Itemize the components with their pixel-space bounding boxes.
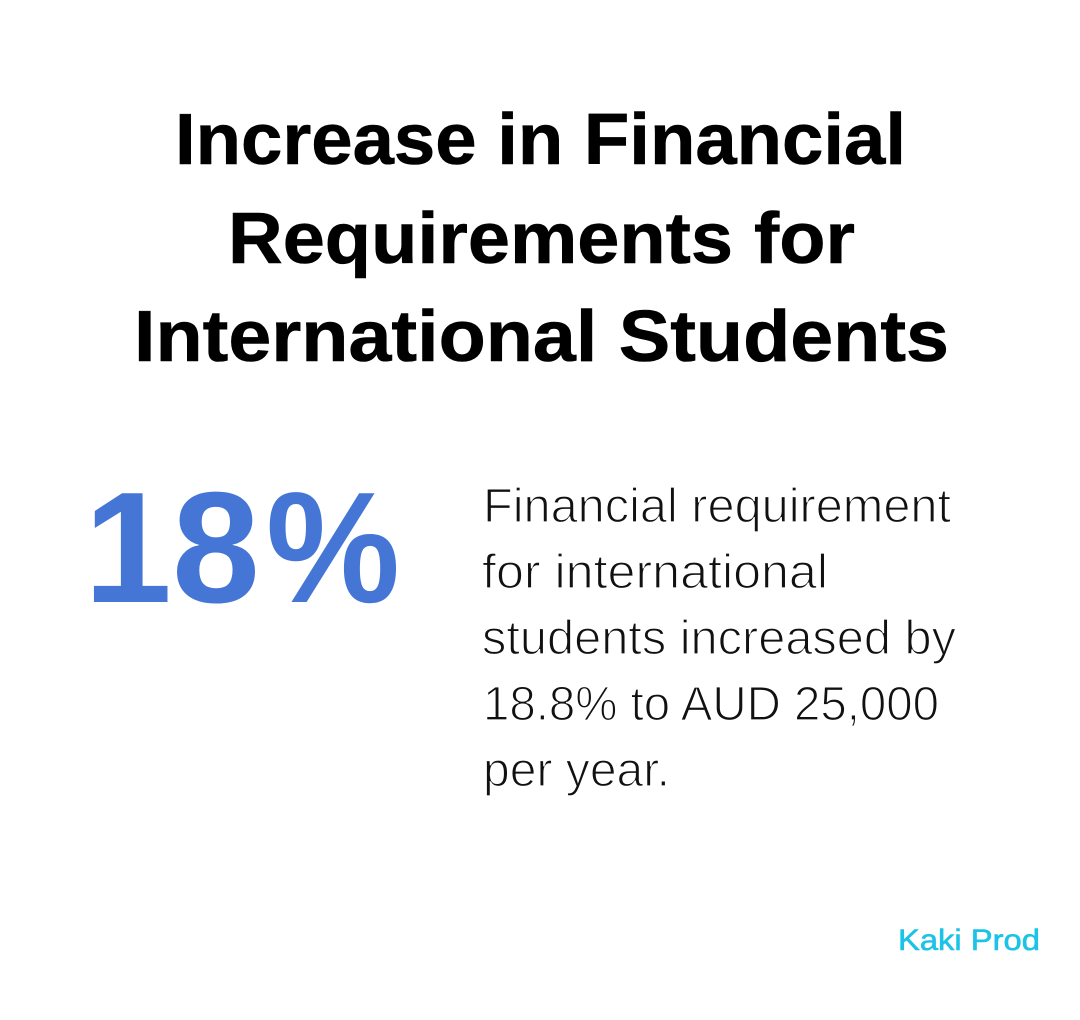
description text: for international: [482, 546, 828, 599]
title: [134, 100, 949, 377]
logo: Kaki Prod: Kaki Prod: [898, 924, 1040, 957]
title: International Students: [134, 297, 949, 377]
description text: Financial requirement: [483, 480, 951, 533]
big statistic: 18%: %: [266, 460, 400, 636]
description text: [482, 480, 956, 797]
description text: 18.8% to AUD 25,000: [483, 678, 939, 731]
description text: students increased by: [482, 612, 956, 665]
big statistic: 18%: 18: [84, 460, 260, 636]
title: Increase in Financial: [175, 100, 906, 180]
big statistic: 18%: [84, 460, 400, 636]
title: Requirements for: [228, 199, 855, 279]
description text: per year.: [483, 744, 670, 797]
